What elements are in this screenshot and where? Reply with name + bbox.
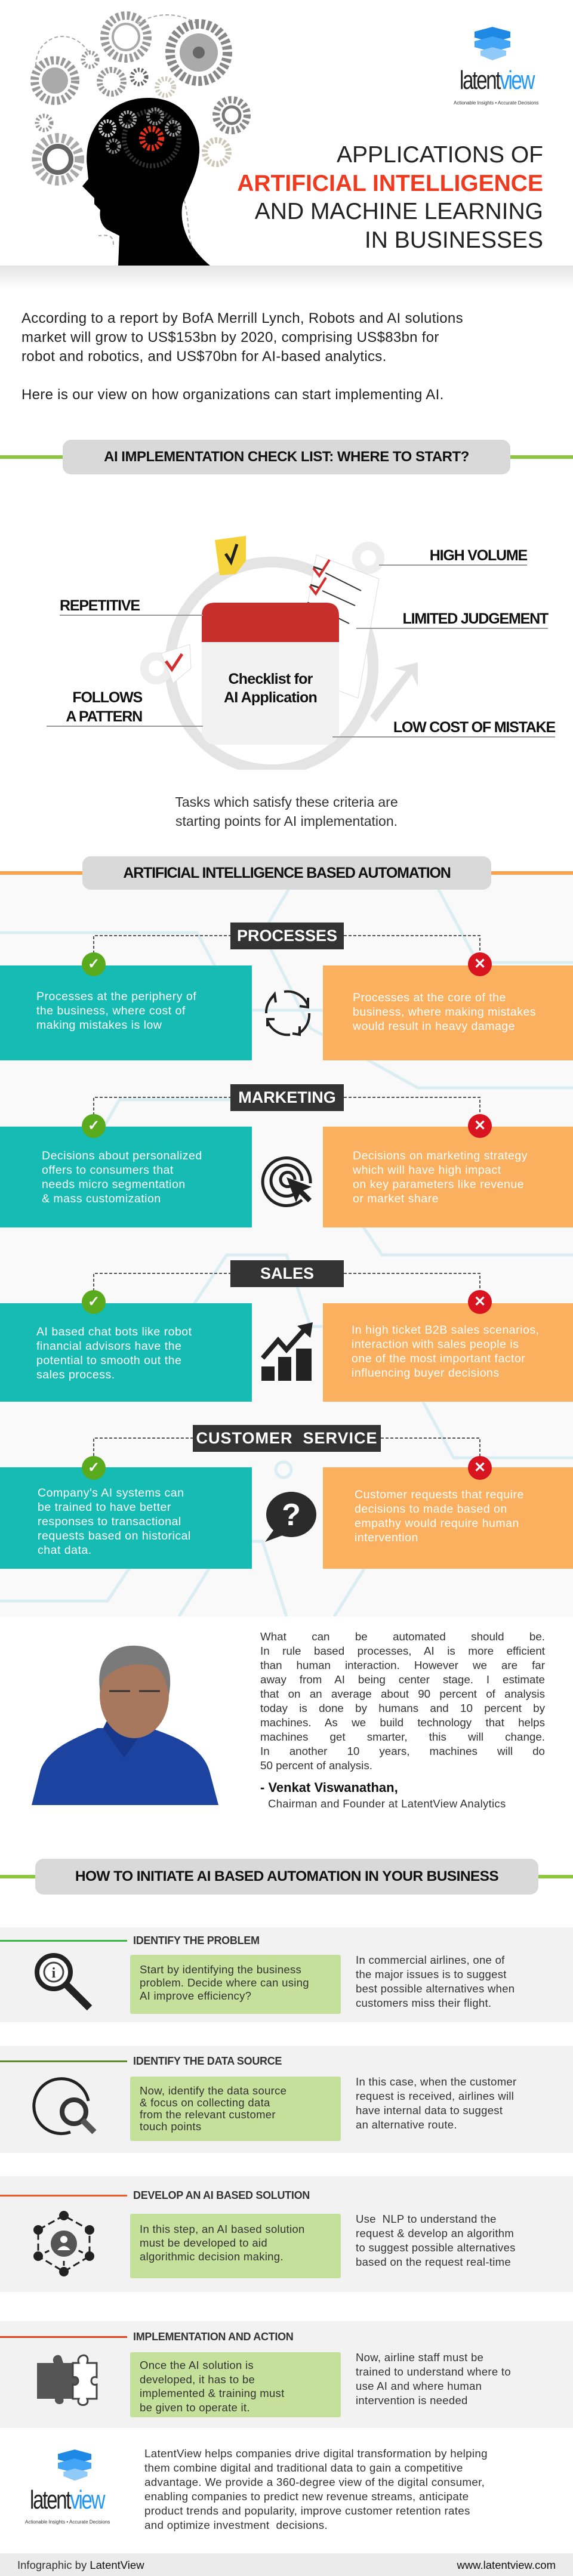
- quote: What can be automated should be.: [260, 1630, 545, 1643]
- step 1: identify the problem: the major issues is to suggest: [356, 1968, 507, 1980]
- heading: AI based automation: ARTIFICIAL INTELLIGENCE BASED AUTOMATION: [123, 865, 451, 881]
- step 2: identify the data source: [0, 2046, 573, 2153]
- quote attribution: - Venkat Viswanathan,: [260, 1780, 398, 1795]
- criteria labels: [379, 547, 527, 566]
- orange box: [323, 965, 573, 1060]
- footer about text: and optimize investment decisions.: [144, 2519, 328, 2531]
- footer about text: LatentView helps companies drive digital transformation by helping: [144, 2447, 488, 2460]
- step 3: develop an AI based solution: must be developed to aid: [140, 2236, 267, 2249]
- title: IN BUSINESSES: [365, 227, 543, 253]
- step 2: identify the data source: IDENTIFY THE DATA SOURCE: [133, 2055, 282, 2067]
- row: customer service: [0, 1425, 573, 1569]
- row: marketing: Decisions about personalized: [42, 1149, 202, 1162]
- row: sales: ✓: [88, 1294, 100, 1310]
- step 1: identify the problem: AI improve efficiency?: [140, 1989, 251, 2002]
- checklist diagram: AI Application: [224, 689, 317, 706]
- row: sales: ✕: [474, 1294, 486, 1310]
- footer logo: [25, 2449, 110, 2525]
- row: customer service: Company's AI systems can: [38, 1486, 184, 1500]
- step 1: identify the problem: Start by identifying the business: [140, 1963, 301, 1976]
- row: processes: Processes at the core of the: [353, 991, 506, 1004]
- icon: growth chart: [261, 1322, 313, 1381]
- row: customer service: ✕: [474, 1460, 486, 1476]
- step 3: develop an AI based solution: [0, 2176, 573, 2292]
- text: FOLLOWS: [72, 689, 142, 706]
- step 3: develop an AI based solution: DEVELOP AN AI BASED SOLUTION: [133, 2189, 310, 2201]
- text: REPETITIVE: [60, 597, 140, 614]
- step 4: implementation and action: [0, 2321, 573, 2428]
- title: AND MACHINE LEARNING: [255, 199, 543, 224]
- logo: Actionable Insights • Accurate Decisions: [454, 100, 538, 106]
- logo: [454, 27, 538, 106]
- row: sales: sales process.: [36, 1368, 115, 1381]
- row: customer service: decisions to made based on: [355, 1503, 507, 1516]
- quote: In rule based processes, AI is more efficient: [260, 1645, 545, 1657]
- step 2: identify the data source: touch points: [140, 2120, 201, 2133]
- icon: target with cursor: [261, 1156, 312, 1207]
- row: marketing: ✓: [88, 1118, 100, 1134]
- caption: starting points for AI implementation.: [175, 813, 398, 829]
- row: sales: AI based chat bots like robot: [36, 1325, 192, 1338]
- step 2: identify the data source: have internal data to suggest: [356, 2104, 503, 2117]
- row: processes: Processes at the periphery of: [36, 990, 196, 1003]
- quote: today is done by humans and 10 percent by: [260, 1702, 545, 1714]
- icon: question bubble: [265, 1492, 316, 1542]
- row: marketing: needs micro segmentation: [42, 1178, 186, 1191]
- row: marketing: [0, 1084, 573, 1227]
- step 2: identify the data source: from the relevant customer: [140, 2108, 276, 2121]
- row: processes: business, where making mistakes: [353, 1005, 536, 1019]
- row: sales: one of the most important factor: [352, 1352, 525, 1365]
- checklist diagram: Checklist for: [228, 671, 313, 687]
- step 3: develop an AI based solution: based on the request real-time: [356, 2256, 511, 2268]
- quote: that on an average about 90 percent of analysis: [260, 1687, 545, 1700]
- bottom bar: Infographic by LatentView: [17, 2559, 144, 2571]
- title: APPLICATIONS OF: [337, 142, 543, 168]
- step 1: identify the problem: In commercial airlines, one of: [356, 1954, 505, 1966]
- title: ARTIFICIAL INTELLIGENCE: [237, 171, 543, 196]
- row: customer service: responses to transactional: [38, 1515, 181, 1528]
- row: marketing: Decisions on marketing strategy: [353, 1149, 528, 1162]
- row: processes: [0, 923, 573, 1060]
- row: customer service: Customer requests that require: [355, 1488, 524, 1501]
- footer about text: them combine digital and traditional data to gain a competitive: [144, 2461, 463, 2474]
- row: marketing: which will have high impact: [353, 1164, 501, 1177]
- icon: cycle arrows: [265, 991, 310, 1036]
- footer about text: [144, 2447, 488, 2531]
- quote: [260, 1630, 545, 1772]
- row: customer service: requests based on historical: [38, 1529, 191, 1542]
- checklist diagram: [47, 536, 418, 770]
- step 2: identify the data source: & focus on collecting data: [140, 2096, 270, 2109]
- row: customer service: intervention: [355, 1531, 418, 1544]
- step 3: develop an AI based solution: algorithmic decision making.: [140, 2250, 284, 2263]
- row: processes: the business, where cost of: [36, 1004, 186, 1017]
- label: [230, 923, 344, 949]
- quote: than human interaction. However we are far: [260, 1659, 545, 1671]
- portrait photo: [32, 1646, 218, 1805]
- row: customer service: empathy would require human: [355, 1517, 519, 1530]
- label: PROCESSES: [237, 927, 337, 945]
- footer logo: Actionable Insights • Accurate Decisions: [25, 2519, 110, 2525]
- icon: question bubble: ?: [282, 1498, 301, 1532]
- row: sales: [0, 1260, 573, 1402]
- step 1: identify the problem: best possible alternatives when: [356, 1982, 515, 1995]
- row: marketing: & mass customization: [42, 1192, 161, 1205]
- bottom bar: www.latentview.com: [457, 2559, 556, 2571]
- intro paragraph: According to a report by BofA Merrill Lynch, Robots and AI solutions: [21, 310, 463, 326]
- row: marketing: on key parameters like revenue: [353, 1178, 524, 1191]
- heading: checklist: AI IMPLEMENTATION CHECK LIST: WHERE TO START?: [104, 449, 469, 465]
- step 2: identify the data source: Now, identify the data source: [140, 2084, 286, 2097]
- row: marketing: or market share: [353, 1192, 439, 1205]
- heading: how to initiate: [35, 1859, 538, 1895]
- row: sales: influencing buyer decisions: [352, 1366, 500, 1380]
- footer about text: advantage. We provide a 360-degree view of the digital consumer,: [144, 2476, 485, 2488]
- automation background with circuit pattern: [0, 873, 573, 1616]
- heading: how to initiate: HOW TO INITIATE AI BASED AUTOMATION IN YOUR BUSINESS: [75, 1868, 498, 1884]
- step 2: identify the data source: request is received, airlines will: [356, 2090, 514, 2102]
- intro paragraph: robot and robotics, and US$70bn for AI-based analytics.: [21, 348, 387, 365]
- row: marketing: offers to consumers that: [42, 1164, 174, 1177]
- teal box: [0, 965, 252, 1060]
- text: Chairman and Founder at LatentView Analytics: [268, 1797, 506, 1810]
- caption: Tasks which satisfy these criteria are: [175, 794, 398, 810]
- quote: In another 10 years, machines will do: [260, 1745, 545, 1757]
- footer about text: product trends and popularity, improve customer retention rates: [144, 2504, 470, 2517]
- step 2: identify the data source: In this case, when the customer: [356, 2075, 516, 2088]
- footer about text: enabling companies to predict new revenue streams, anticipate: [144, 2490, 469, 2503]
- step 4: implementation and action: developed, it has to be: [140, 2373, 255, 2386]
- quote: away from AI being center stage. I estimate: [260, 1673, 545, 1686]
- step 4: implementation and action: Once the AI solution is: [140, 2359, 254, 2371]
- row: customer service: be trained to have better: [38, 1501, 171, 1514]
- step 4: implementation and action: Now, airline staff must be: [356, 2351, 483, 2364]
- criteria labels: HIGH VOLUME: [430, 547, 527, 564]
- step 4: implementation and action: IMPLEMENTATION AND ACTION: [133, 2331, 293, 2343]
- step 1: identify the problem: [0, 1927, 573, 2022]
- step 3: develop an AI based solution: Use NLP to understand the: [356, 2213, 497, 2225]
- row: processes: ✕: [474, 956, 486, 972]
- intro paragraph: Here is our view on how organizations can start implementing AI.: [21, 387, 444, 403]
- caption: [175, 794, 398, 829]
- row: customer service: chat data.: [38, 1544, 92, 1557]
- row: customer service: CUSTOMER SERVICE: [196, 1429, 378, 1447]
- bottom bar: [0, 2553, 573, 2576]
- row: sales: potential to smooth out the: [36, 1354, 181, 1367]
- step 1: identify the problem: problem. Decide where can using: [140, 1976, 309, 1989]
- intro paragraph: [21, 310, 463, 403]
- text: LIMITED JUDGEMENT: [402, 610, 548, 627]
- heading: checklist: [63, 440, 510, 474]
- step 4: implementation and action: use AI and where human: [356, 2380, 482, 2392]
- text: A PATTERN: [66, 708, 142, 725]
- footer logo: latentview: [30, 2485, 104, 2515]
- intro paragraph: market will grow to US$153bn by 2020, comprising US$83bn for: [21, 329, 439, 345]
- row: customer service: ✓: [88, 1460, 100, 1476]
- row: sales: interaction with sales people is: [352, 1338, 519, 1351]
- row: processes: making mistakes is low: [36, 1019, 162, 1032]
- step 4: implementation and action: implemented & training must: [140, 2387, 285, 2399]
- step 4: implementation and action: trained to understand where to: [356, 2365, 511, 2378]
- heading: AI based automation: [82, 856, 491, 890]
- quote: machines get smarter, this will change.: [260, 1730, 545, 1743]
- row: sales: In high ticket B2B sales scenarios,: [352, 1324, 540, 1337]
- logo: latentview: [460, 66, 534, 95]
- header illustration: head with gears: [30, 11, 251, 266]
- step 4: implementation and action: be given to operate it.: [140, 2401, 250, 2413]
- step 1: identify the problem: IDENTIFY THE PROBLEM: [133, 1935, 260, 1946]
- quote: 50 percent of analysis.: [260, 1759, 372, 1772]
- step 3: develop an AI based solution: to suggest possible alternatives: [356, 2241, 516, 2254]
- row: marketing: ✕: [474, 1118, 486, 1134]
- row: sales: SALES: [260, 1264, 314, 1282]
- step 3: develop an AI based solution: In this step, an AI based solution: [140, 2223, 305, 2235]
- row: processes: would result in heavy damage: [353, 1020, 515, 1033]
- row: sales: financial advisors have the: [36, 1340, 181, 1353]
- step 1: identify the problem: customers miss their flight.: [356, 1997, 491, 2009]
- step 2: identify the data source: an alternative route.: [356, 2118, 457, 2131]
- text: LOW COST OF MISTAKE: [393, 719, 555, 736]
- title: [237, 142, 543, 253]
- step 3: develop an AI based solution: request & develop an algorithm: [356, 2227, 514, 2239]
- step 4: implementation and action: intervention is needed: [356, 2394, 468, 2407]
- row: marketing: MARKETING: [238, 1088, 336, 1106]
- step 1: identify the problem: i: [52, 1966, 56, 1981]
- row: processes: ✓: [88, 956, 100, 972]
- quote: machines. As we build technology that helps: [260, 1716, 545, 1729]
